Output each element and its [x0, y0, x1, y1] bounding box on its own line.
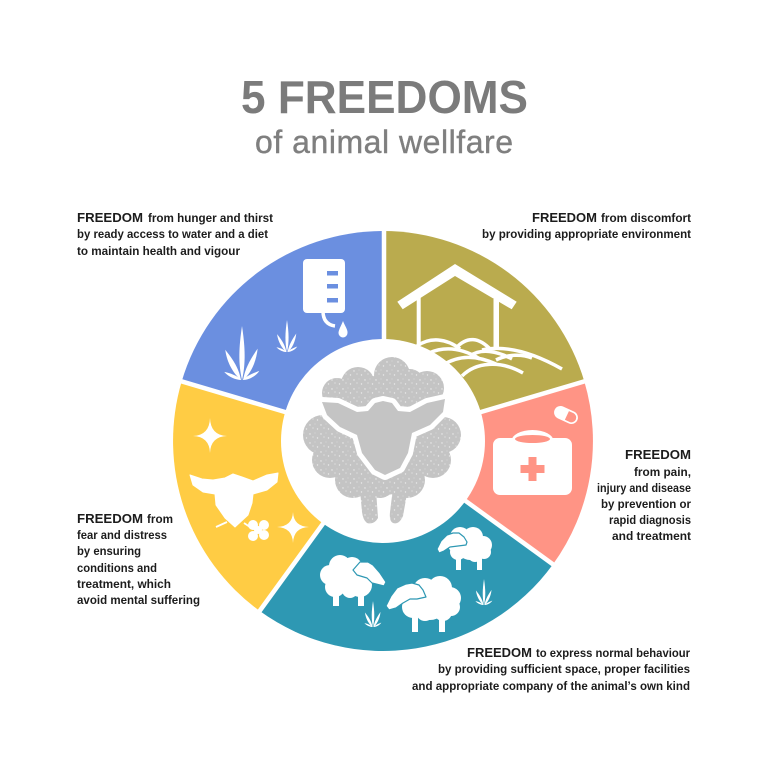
icon: large grass: [224, 326, 259, 380]
text: pain, injury and disease: and treatment: [612, 529, 691, 543]
icon: grass left: [364, 601, 381, 627]
text: hunger and thirst: FREEDOM: [77, 211, 143, 225]
panel: hunger and thirst segment: [182, 231, 383, 441]
text: fear and distress: fear and distress: [77, 528, 167, 542]
panel: normal behaviour segment: [260, 441, 553, 651]
text: hunger and thirst: from hunger and thirst: [148, 211, 273, 225]
text: hunger and thirst: [77, 211, 273, 258]
white divider lines: [176, 225, 590, 616]
text: discomfort: FREEDOM: [532, 211, 597, 225]
icon: sparkle lower: [277, 512, 309, 543]
icon: small grass: [276, 320, 297, 352]
icon: shelter with hay: [397, 264, 562, 376]
text: fear and distress: FREEDOM: [77, 512, 143, 526]
text: fear and distress: avoid mental suffering: [77, 593, 200, 607]
text: discomfort: from discomfort: [601, 211, 691, 225]
text: fear and distress: from: [147, 512, 173, 526]
icon: sheep top right: [437, 527, 492, 570]
text: pain, injury and disease: from pain,: [634, 465, 691, 479]
icon: feed bag with drip: [303, 259, 348, 338]
text: pain, injury and disease: by prevention or: [601, 497, 691, 511]
text: pain, injury and disease: FREEDOM: [625, 448, 691, 462]
text: normal behaviour: to express normal behaviour: [536, 646, 690, 660]
text: normal behaviour: [412, 646, 690, 693]
subtitle: of animal wellfare: [255, 124, 513, 160]
title: 5 FREEDOMS: [241, 71, 528, 123]
text: normal behaviour: by providing sufficient space, proper facilities: [438, 662, 690, 676]
text: fear and distress: [77, 512, 200, 607]
icon: sheep wool: [303, 357, 461, 523]
panel: pain, injury and disease segment: [383, 381, 593, 564]
text: discomfort: by providing appropriate environment: [482, 227, 691, 241]
icon: sheep head with clover: [190, 473, 278, 541]
icon: sheep head: [322, 399, 445, 475]
text: pain, injury and disease: rapid diagnosis: [609, 513, 691, 527]
icon: first aid case: [493, 430, 572, 495]
panel: fear and distress segment: [173, 381, 383, 611]
icon: sheep left: [320, 555, 386, 606]
text: fear and distress: conditions and: [77, 561, 157, 575]
icon: sparkle upper: [193, 418, 227, 453]
panel: discomfort segment: [383, 231, 584, 441]
icon: grass right: [475, 579, 492, 605]
text: pain, injury and disease: [597, 448, 691, 543]
text: normal behaviour: FREEDOM: [467, 646, 532, 660]
text: hunger and thirst: to maintain health and vigour: [77, 244, 240, 258]
panel: central sheep circle: [281, 339, 485, 543]
text: discomfort: [482, 211, 691, 241]
text: pain, injury and disease: injury and disease: [597, 481, 691, 495]
text: hunger and thirst: by ready access to water and a diet: [77, 227, 268, 241]
icon: pill: [552, 404, 580, 426]
text: fear and distress: treatment, which: [77, 577, 171, 591]
text: normal behaviour: and appropriate company of the animal’s own kind: [412, 679, 690, 693]
icon: sheep middle: [386, 576, 461, 632]
text: fear and distress: by ensuring: [77, 544, 141, 558]
